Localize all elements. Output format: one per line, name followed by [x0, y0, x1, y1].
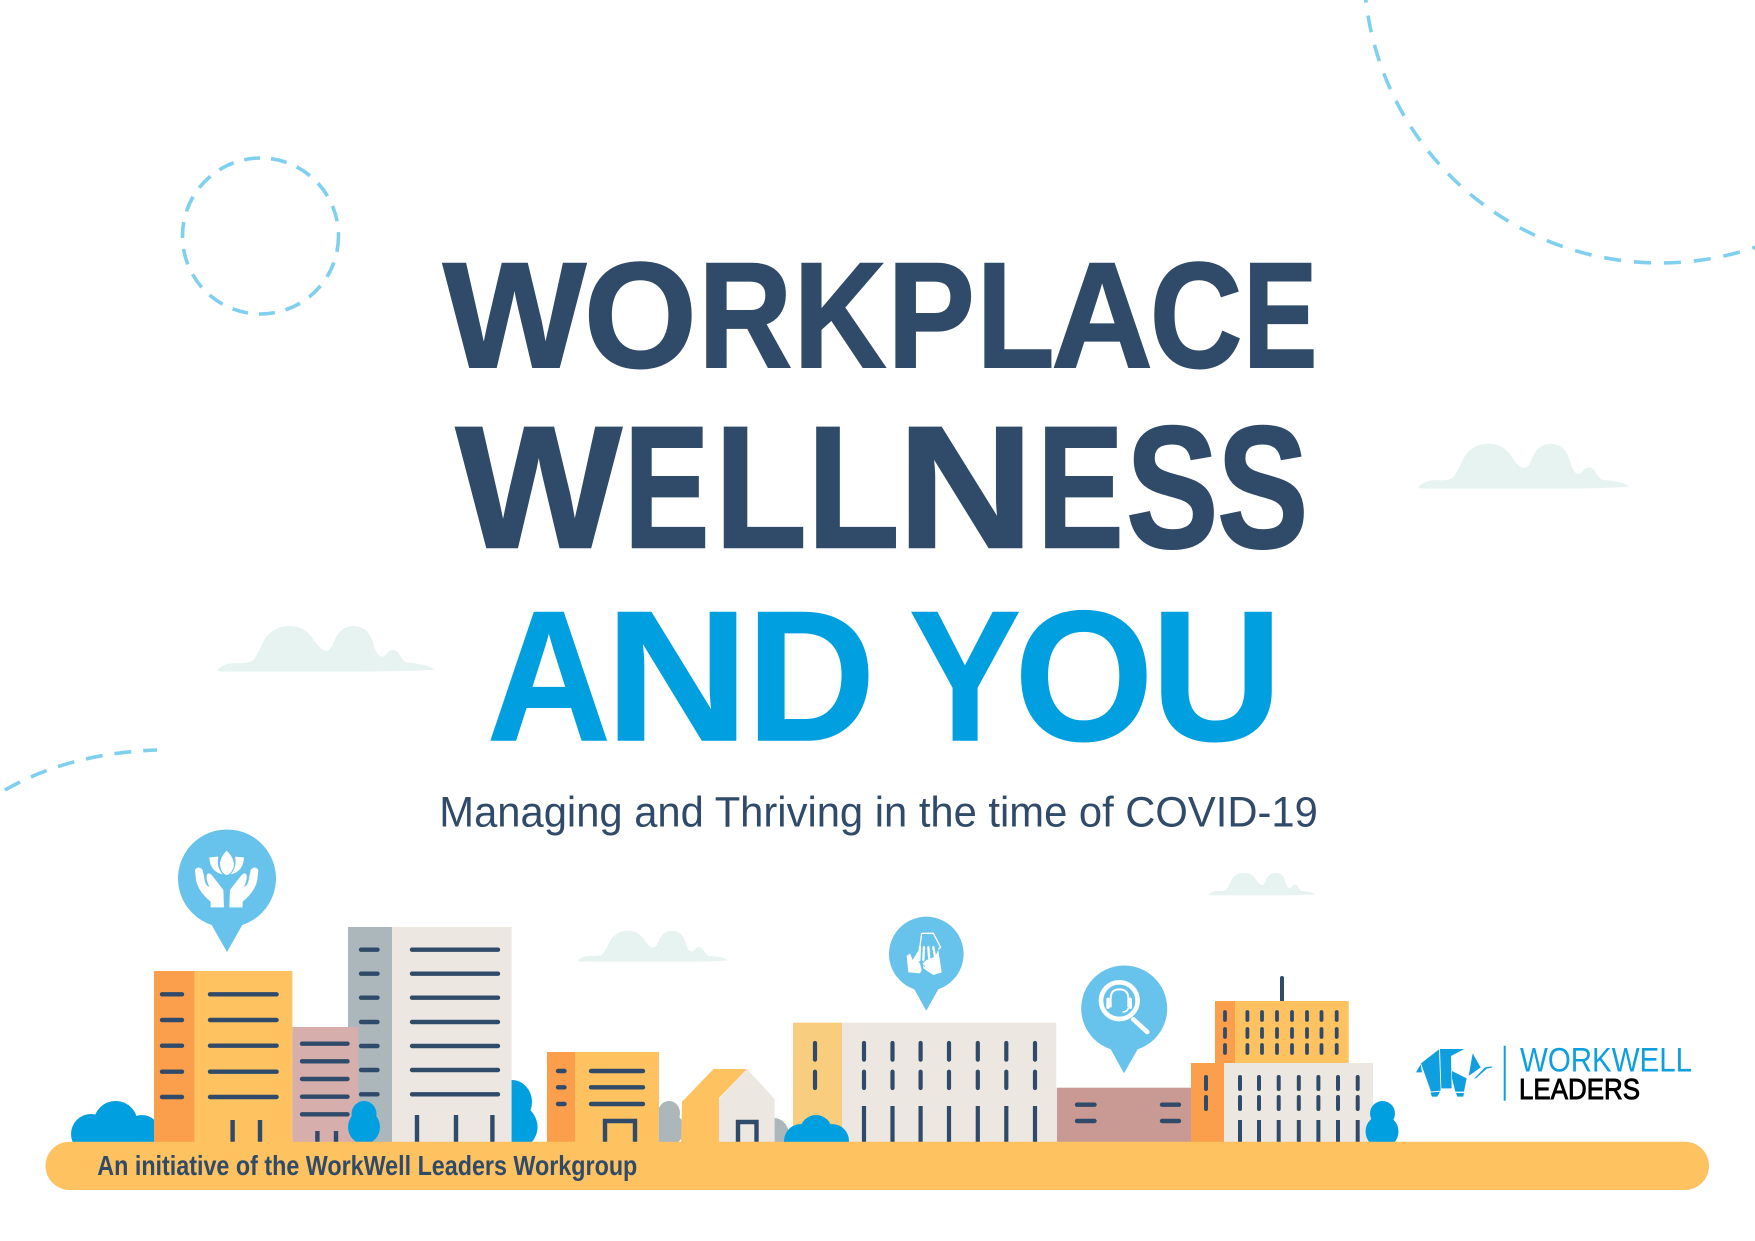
title: U	[1151, 573, 1282, 780]
building: tall grey and cream	[348, 927, 512, 1143]
title: S	[1217, 389, 1308, 584]
tree: on wide building	[784, 1115, 849, 1158]
title: L	[714, 389, 807, 584]
pin: headset magnifier	[1081, 965, 1167, 1073]
title: E	[1243, 231, 1317, 399]
tree: small on pink building	[348, 1101, 380, 1144]
title: R	[698, 231, 792, 399]
title: O	[584, 231, 697, 399]
building: wide cream	[793, 1023, 1056, 1143]
building: orange and yellow left	[154, 971, 292, 1143]
building: small orange and yellow	[547, 1052, 659, 1143]
tree: cloud-shaped left	[71, 1101, 160, 1154]
building: upper yellow block with antenna	[1215, 978, 1349, 1064]
title: N	[897, 389, 1034, 584]
title: N	[605, 573, 749, 780]
cloud: upper right	[1418, 444, 1630, 489]
title: K	[794, 231, 886, 399]
cloud: left	[217, 626, 435, 672]
tree: right	[1366, 1101, 1398, 1148]
building: lower cream and orange	[1191, 1063, 1373, 1143]
pin: hands holding lotus	[178, 829, 276, 952]
title: P	[888, 231, 975, 399]
pin: joined hands	[889, 917, 964, 1011]
title: S	[1126, 389, 1218, 584]
tree: behind tall building	[486, 1080, 538, 1151]
bar caption: An initiative of the WorkWell Leaders Workgroup	[97, 1150, 637, 1181]
title: A	[1052, 231, 1153, 399]
building: pink	[292, 1027, 358, 1143]
title: E	[624, 389, 710, 584]
cloud: small centre	[578, 931, 728, 962]
trees: grey	[652, 1101, 789, 1152]
logo: WorkWell Leaders: WORKWELL	[1520, 1042, 1692, 1080]
cloud: small right	[1209, 873, 1316, 895]
icon: origami elephant	[1416, 1049, 1492, 1097]
title: C	[1150, 231, 1242, 399]
logo: WorkWell Leaders: LEADERS	[1519, 1074, 1640, 1106]
title: A	[487, 573, 611, 780]
title: D	[746, 573, 876, 780]
title: E	[1037, 389, 1124, 584]
subtitle: Managing and Thriving in the time of COVID-19	[439, 789, 1318, 837]
title: W	[456, 389, 623, 584]
building: low pink	[1057, 1088, 1197, 1143]
ground bar	[46, 1142, 1709, 1190]
title	[443, 231, 1317, 780]
house	[681, 1069, 775, 1143]
title: Y	[909, 573, 1021, 780]
title: W	[443, 231, 586, 399]
title: O	[1014, 573, 1154, 780]
logo: WorkWell Leaders	[1416, 1042, 1692, 1106]
skyline	[71, 927, 1398, 1158]
title: L	[977, 231, 1054, 399]
title: L	[807, 389, 900, 584]
